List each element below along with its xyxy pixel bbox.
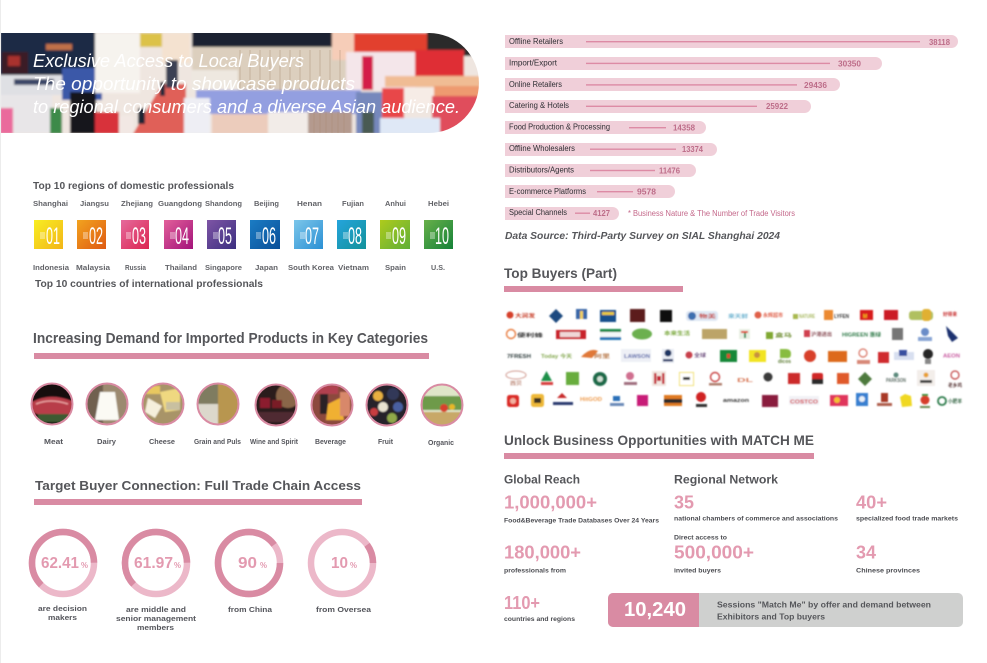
column: global reach: Global Reach [504, 472, 580, 486]
banner headline: Exclusive Access to Local Buyers [33, 51, 304, 71]
bar: offline wholesalers: Offline Wholesalers [509, 144, 575, 153]
logo row 1: 来天鲜 [728, 313, 748, 320]
logo row 5: amazon [723, 398, 749, 404]
logo row 1: NATURE [799, 314, 816, 320]
icon: organic [420, 383, 464, 427]
logo row 1: 物美 [699, 313, 716, 320]
logo row 1: 大润发 [515, 312, 535, 320]
international country labels: U.S. [431, 263, 445, 272]
stat: 110+: countries and regions [504, 616, 575, 623]
logo row 3: 7FRESH [507, 354, 531, 360]
domestic region labels: Shandong [205, 199, 242, 208]
icon: beverage [310, 383, 354, 427]
bar: offline wholesalers [505, 143, 717, 156]
logo row 5: 小肥羊 [948, 398, 962, 405]
logo row 4 [506, 370, 962, 389]
bar: online retailers: Online Retailers [509, 80, 562, 89]
chart footnote: * Business Nature & The Number of Trade Visitors [628, 209, 795, 218]
stat: 34 [856, 542, 920, 574]
bar: online retailers: 29436 [804, 81, 828, 90]
domestic region labels [33, 199, 449, 208]
heading: target buyer connection [34, 478, 362, 505]
international country labels: Spain [385, 263, 406, 272]
logo row 1: 好得来 [943, 311, 957, 318]
category labels: Dairy [97, 437, 116, 446]
heading: increasing demand: Increasing Demand for Imported Products in Key Categories [33, 330, 428, 347]
category labels: Meat [44, 437, 64, 446]
heading: unlock business opportunities: Unlock Business Opportunities with MATCH ME [504, 432, 814, 448]
bar: catering and hotels [505, 100, 811, 113]
stat: 1,000,000+: Food&Beverage Trade Databases Over 24 Years [504, 518, 659, 524]
donut: 62.41% decision makers: % [81, 561, 88, 570]
column: regional network [674, 472, 958, 574]
stat: 35: national chambers of commerce and associations [674, 516, 838, 522]
logo row 1: LYFEN [834, 314, 849, 320]
logo row 1: M [863, 314, 867, 320]
data source note: Data Source: Third-Party Survey on SIAL Shanghai 2024 [505, 231, 780, 242]
icon: dairy [85, 382, 129, 426]
bar: offline retailers: Offline Retailers [509, 37, 563, 46]
heading: increasing demand [33, 330, 429, 359]
logo row 2 [506, 326, 958, 342]
donut: 62.41% decision makers: are decision [38, 604, 87, 613]
logo row 3: dicos [778, 359, 791, 365]
donut: 10% from Oversea: % [350, 561, 357, 570]
international country labels: Japan [255, 263, 278, 272]
logo row 3: AEON [943, 354, 960, 360]
bar: import/export: Import/Export [509, 58, 558, 68]
logo row 1: 永辉超市 [763, 312, 783, 319]
international country labels: South Korea [288, 263, 335, 272]
heading: top buyers: Top Buyers (Part) [504, 265, 617, 281]
domestic region labels: Anhui [385, 199, 406, 208]
domestic region labels: Jiangsu [80, 199, 109, 208]
bar: special channels: Special Channels [509, 208, 567, 217]
bar: food production and processing: Food Production & Processing [509, 122, 610, 132]
domestic region labels: Beijing [254, 199, 279, 208]
donut: 61.97% middle and senior management: are middle and [126, 605, 186, 614]
international country labels: Singapore [205, 263, 242, 272]
banner headline [33, 51, 460, 117]
bar: offline retailers [505, 35, 958, 48]
logo row 5: HitGOD [580, 397, 602, 403]
stat: 180,000+: 180,000+ [504, 542, 581, 562]
logo row 3: 阿里 [594, 353, 610, 360]
category labels: Fruit [378, 437, 394, 446]
banner headline: The opportunity to showcase products [33, 74, 355, 94]
ranking tiles 01 to 10: 08 [348, 223, 362, 250]
heading: top 10 regions of domestic professionals: Top 10 regions of domestic professionals [33, 180, 234, 192]
stat: 1,000,000+: 1,000,000+ [504, 492, 597, 512]
bar: e-commerce platforms: E-commerce Platforms [509, 187, 586, 196]
international country labels: Malaysia [76, 263, 111, 272]
logo row 3: LAWSON [624, 354, 650, 360]
domestic region labels: Fujian [342, 199, 364, 208]
stat: 34: 34 [856, 542, 876, 562]
logo wall: top buyers [506, 309, 962, 408]
banner headline: to regional consumers and a diverse Asian audience. [33, 97, 460, 117]
bar: online retailers [505, 78, 840, 91]
bar: distributors/agents: 11476 [659, 166, 681, 176]
logo row 3: Today 今天 [541, 353, 572, 360]
bar: offline wholesalers: 13374 [682, 145, 704, 154]
donut: 62.41% decision makers [19, 519, 107, 622]
logo row 5: COSTCO [790, 400, 818, 406]
stat: 500,000+ [674, 534, 754, 574]
category labels: Organic [428, 438, 454, 447]
heading: top 10 countries of international professionals: Top 10 countries of international professionals [35, 278, 263, 290]
stat: 34: Chinese provinces [856, 568, 920, 574]
icon: fruit [365, 383, 409, 427]
donut: 90% from China: % [260, 561, 267, 570]
ranking tiles 01 to 10: 01 [46, 223, 60, 250]
bar: import/export: 30350 [838, 60, 862, 68]
ranking tiles 01 to 10: 09 [392, 223, 406, 250]
logo row 4: 老乡鸡 [948, 382, 962, 389]
stat: 180,000+ [504, 542, 581, 574]
stat: 40+: specialized food trade markets [856, 516, 958, 522]
international country labels: Thailand [165, 263, 197, 272]
icon: cheese [141, 382, 185, 426]
bar chart: business nature and number of trade visitors [505, 35, 958, 220]
logo row 4: 西贝 [510, 381, 522, 387]
icon: wine and spirit [254, 383, 300, 427]
donut: 61.97% middle and senior management: members [137, 623, 174, 632]
ranking tiles 01 to 10: 03 [132, 223, 146, 250]
logo row 5 [507, 392, 962, 408]
donut: 10% from Oversea [299, 520, 385, 614]
callout: 10,240 match me sessions: Exhibitors and Top buyers [717, 612, 825, 622]
logo row 3: 全球 [694, 352, 706, 359]
logo row 2: 便利蜂 [517, 332, 543, 339]
bar: distributors/agents: Distributors/Agents [509, 166, 574, 174]
stat: 500,000+: Direct access to [674, 534, 727, 542]
logo row 2: 沪港进出 [811, 331, 832, 338]
category labels: Wine and Spirit [250, 437, 299, 446]
bar: special channels: 4127 [593, 209, 611, 218]
column: global reach [504, 472, 659, 623]
banner: exhibition hall photo with headline [0, 30, 490, 136]
donut: 90% from China: from China [228, 605, 273, 614]
ranking tiles 01 to 10: 06 [262, 223, 276, 250]
stat: 500,000+: 500,000+ [674, 542, 754, 562]
category labels: Grain and Puls [194, 437, 241, 446]
category labels: Beverage [315, 437, 346, 446]
bar: e-commerce platforms [505, 185, 675, 198]
stat: 40+ [856, 492, 958, 522]
icon: meat [30, 382, 74, 426]
column: regional network: Regional Network [674, 472, 778, 486]
ranking tiles 01 to 10 [34, 220, 453, 250]
international country labels: Indonesia [33, 263, 70, 272]
callout: 10,240 match me sessions: 10,240 [624, 599, 686, 621]
donut: 62.41% decision makers: makers [48, 613, 77, 622]
international country labels: Vietnam [338, 263, 369, 272]
logo row 4: PARKSON [886, 378, 906, 384]
domestic region labels: Guangdong [158, 199, 202, 208]
logo row 1 [506, 309, 957, 323]
stat: 180,000+: professionals from [504, 568, 566, 574]
logo row 4: DL [737, 378, 753, 384]
donut: 61.97% middle and senior management [112, 519, 200, 632]
bar: e-commerce platforms: 9578 [637, 188, 657, 196]
domestic region labels: Henan [297, 199, 322, 208]
bar: catering and hotels: Catering & Hotels [509, 101, 569, 110]
bar: import/export [505, 57, 882, 70]
ranking tiles 01 to 10: 02 [89, 223, 103, 250]
heading: unlock business opportunities [504, 432, 814, 459]
stat: 1,000,000+ [504, 492, 659, 524]
callout: 10,240 match me sessions: Sessions "Match Me" by offer and demand between [717, 600, 931, 610]
international country labels [33, 263, 445, 272]
ranking tiles 01 to 10: 07 [305, 223, 319, 250]
heading: target buyer connection: Target Buyer Connection: Full Trade Chain Access [35, 478, 361, 493]
stat: 500,000+: invited buyers [674, 568, 721, 574]
donut: 10% from Oversea: from Oversea [316, 605, 372, 614]
stat: 35: 35 [674, 492, 694, 512]
bar: food production and processing: 14358 [673, 124, 696, 132]
category photo circles [30, 382, 464, 427]
ranking tiles 01 to 10: 04 [175, 223, 189, 250]
donut: 90% from China: 90 [238, 555, 257, 572]
heading: top buyers [504, 265, 683, 292]
category labels [44, 437, 454, 447]
domestic region labels: Shanghai [33, 199, 68, 208]
bar: food production and processing [505, 121, 706, 134]
banner photo [0, 30, 490, 136]
bar: catering and hotels: 25922 [766, 102, 789, 111]
ranking tiles 01 to 10: 05 [218, 223, 232, 250]
donut: 61.97% middle and senior management: % [174, 561, 181, 570]
logo row 2: HIGREEN 惠绿 [842, 332, 881, 338]
logo row 2: 本来生活 [664, 330, 690, 337]
domestic region labels: Zhejiang [121, 199, 153, 208]
stat: 110+ [504, 593, 575, 623]
donut: 61.97% middle and senior management: senior management [116, 614, 197, 623]
ranking tiles 01 to 10: 10 [435, 223, 449, 250]
international country labels: Russia [125, 263, 147, 272]
donut: 10% from Oversea: 10 [331, 555, 348, 572]
icon: grain and puls [196, 382, 240, 426]
stat: 40+: 40+ [856, 492, 887, 512]
stat: 110+: 110+ [504, 593, 540, 613]
logo row 3 [507, 349, 960, 365]
logo row 2: 盒马 [775, 332, 792, 339]
domestic region labels: Hebei [428, 199, 449, 208]
bar: distributors/agents [505, 164, 696, 177]
donut: 90% from China [218, 532, 280, 614]
bar: special channels [505, 207, 619, 220]
bar: offline retailers: 38118 [929, 38, 951, 47]
donut: 62.41% decision makers: 62.41 [41, 555, 79, 572]
stat: 35 [674, 492, 838, 522]
donut: 61.97% middle and senior management: 61.97 [134, 555, 173, 572]
callout: 10,240 match me sessions [608, 593, 963, 627]
category labels: Cheese [149, 437, 175, 446]
